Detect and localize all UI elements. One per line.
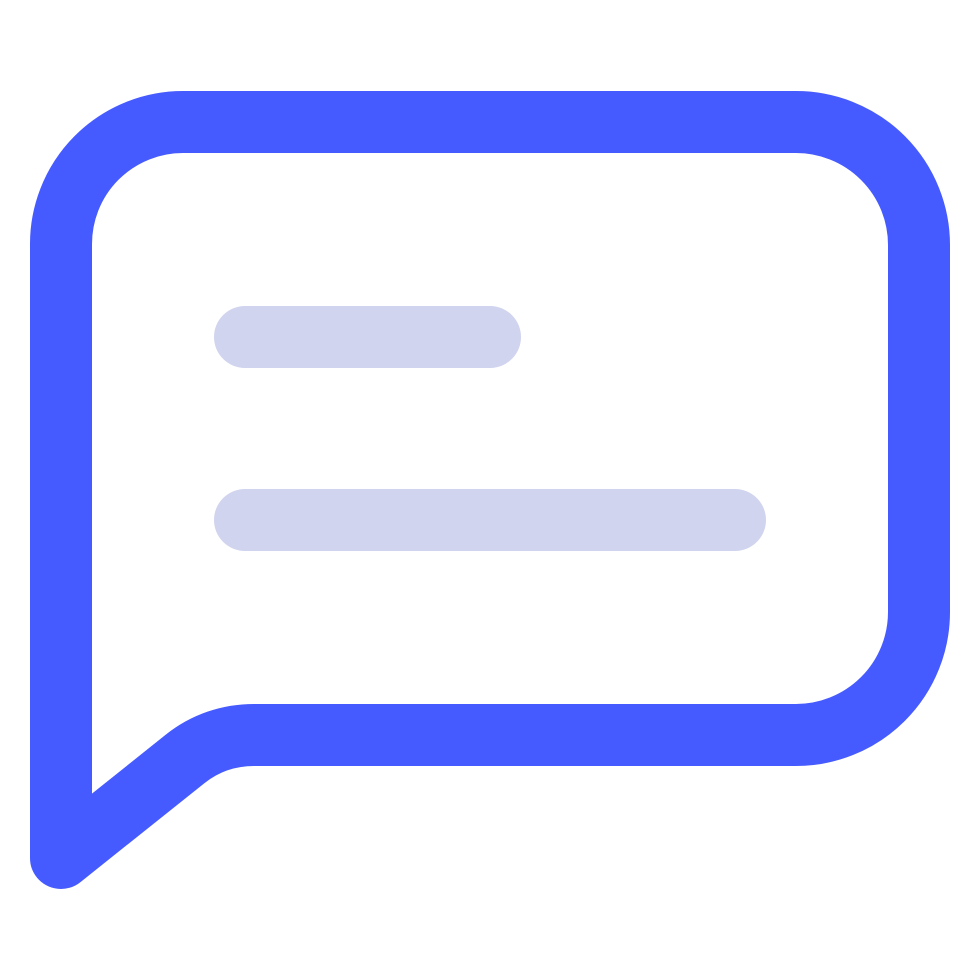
long text line xyxy=(214,489,766,551)
short text line xyxy=(214,306,521,368)
speech bubble outline xyxy=(61,122,919,858)
